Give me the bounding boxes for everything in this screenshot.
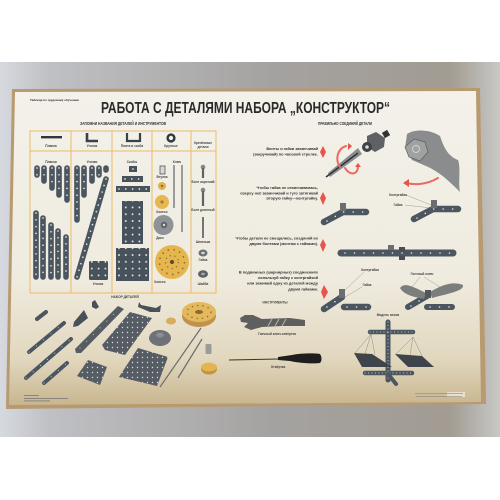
column: fasteners: Болт короткий bbox=[191, 180, 215, 184]
hinged joint with wrenches: Гаечный ключ bbox=[411, 272, 433, 276]
tool: wrench: Гаечный ключ-отвёртка bbox=[258, 332, 296, 336]
icon: red marker 1 bbox=[320, 146, 326, 158]
axles bbox=[160, 328, 202, 387]
small gold wheel bbox=[166, 318, 176, 324]
large wrench illustration bbox=[405, 130, 460, 192]
model scale: Модель весов bbox=[377, 313, 399, 317]
column: fasteners: Шайба bbox=[198, 282, 209, 286]
column headers with icons: детали bbox=[197, 145, 209, 149]
heading: parts set: НАБОР ДЕТАЛЕЙ bbox=[111, 295, 139, 299]
poster board bbox=[6, 88, 486, 409]
step 3 text: двумя болтами (монтаж с гайками). bbox=[249, 241, 318, 246]
panel: parts table bbox=[30, 131, 216, 293]
step 2 text: сверху неё завинчивай и туго затягивай bbox=[240, 190, 319, 195]
joint: strips with labels bbox=[389, 193, 458, 219]
imprint text bottom left bbox=[24, 395, 68, 401]
step 4 text: используй гайку с контргайкой bbox=[258, 275, 319, 280]
column: round parts: Колесо bbox=[154, 280, 166, 284]
tools heading: ИНСТРУМЕНТЫ bbox=[263, 300, 287, 304]
icon: red marker 2 bbox=[320, 192, 326, 205]
red rotation arrows bbox=[337, 143, 361, 173]
column: plates: Скобы bbox=[127, 160, 138, 164]
grey disc bbox=[149, 330, 171, 346]
step 2 text: Чтобы гайка не отвинчивалась, bbox=[257, 185, 318, 190]
tool: screwdriver: Отвёртка bbox=[271, 365, 286, 369]
column: fasteners: Гайка bbox=[199, 258, 208, 262]
column headers with icons: Плита и скоба bbox=[121, 144, 143, 148]
column headers with icons: Крепёжные bbox=[194, 141, 212, 145]
perforated plates bbox=[77, 312, 168, 386]
column: round parts: Ключ bbox=[173, 160, 181, 164]
joint: strips with bolt bbox=[324, 203, 366, 222]
gold wheel bbox=[201, 362, 217, 374]
step 2 text: вторую гайку—контргайку. bbox=[266, 196, 318, 201]
step 4 text: двумя гайками. bbox=[288, 286, 318, 291]
hinged joint: Контргайка bbox=[361, 268, 379, 272]
tool: wrench bbox=[240, 315, 305, 336]
column: round parts: Колесо bbox=[156, 210, 168, 214]
title: РАБОТА С ДЕТАЛЯМИ НАБОРА „КОНСТРУКТОР“ bbox=[101, 100, 390, 117]
column: plates bbox=[116, 160, 150, 281]
table grid bbox=[30, 131, 216, 293]
long channel bbox=[75, 306, 124, 353]
column: fasteners bbox=[191, 165, 215, 286]
small brackets bbox=[73, 300, 161, 327]
column headers with icons: Уголок bbox=[87, 144, 98, 148]
step 1 text: Винты и гайки завинчивай bbox=[266, 146, 319, 151]
hinged joint bbox=[324, 268, 379, 309]
column: flat strips: Планки bbox=[45, 160, 57, 164]
column: round parts: Втулка bbox=[156, 175, 168, 179]
icon: red marker 4 bbox=[321, 285, 328, 299]
wrench on bolt bbox=[326, 130, 390, 177]
imprint text bottom right bbox=[415, 392, 465, 397]
column: angle strips: Уголки bbox=[87, 160, 97, 164]
panel: parts set photo bbox=[26, 300, 217, 387]
photo background wall bbox=[0, 62, 500, 437]
step 3 text: Чтобы детали не смещались, соединяй их bbox=[236, 236, 319, 240]
column: fasteners: Шпилька bbox=[196, 240, 210, 244]
hinged joint with wrenches bbox=[400, 272, 463, 307]
model scale bbox=[354, 313, 434, 384]
joint: long strips with two bolts bbox=[341, 245, 453, 260]
tool: screwdriver bbox=[229, 353, 322, 369]
bushing bbox=[206, 344, 212, 354]
column: round parts: Диск bbox=[156, 236, 164, 240]
hinged joint: Гайка bbox=[363, 283, 372, 287]
small header note: Таблица по трудовому обучению bbox=[30, 98, 79, 102]
red arrow bbox=[403, 178, 438, 187]
step 4 text: или зажимай одну из деталей между bbox=[247, 281, 319, 286]
column: flat strips bbox=[36, 160, 67, 277]
column: angle strips bbox=[77, 160, 108, 286]
loose strips bbox=[26, 312, 71, 383]
step 1 text: (закручивай) по часовой стрелке. bbox=[253, 152, 318, 156]
column headers with icons: Планка bbox=[45, 144, 57, 148]
column: fasteners: Болт длинный bbox=[191, 208, 215, 212]
step 4 text: В подвижных (шарнирных) соединениях bbox=[239, 270, 319, 274]
icon: red marker 3 bbox=[320, 239, 326, 252]
column: angle strips: Уголок bbox=[93, 282, 104, 286]
right section heading: ПРАВИЛЬНО СОЕДИНЯЙ ДЕТАЛИ bbox=[318, 121, 372, 126]
joint: strips with labels: Гайка bbox=[394, 203, 403, 207]
column: round parts bbox=[154, 160, 189, 284]
left section heading: ЗАПОМНИ НАЗВАНИЯ ДЕТАЛЕЙ И ИНСТРУМЕНТОВ bbox=[80, 121, 166, 126]
joint: strips with labels: Контргайка bbox=[389, 193, 407, 197]
column headers with icons bbox=[41, 133, 212, 149]
column headers with icons: Круглые bbox=[164, 144, 178, 148]
large gold wheel bbox=[182, 302, 216, 327]
